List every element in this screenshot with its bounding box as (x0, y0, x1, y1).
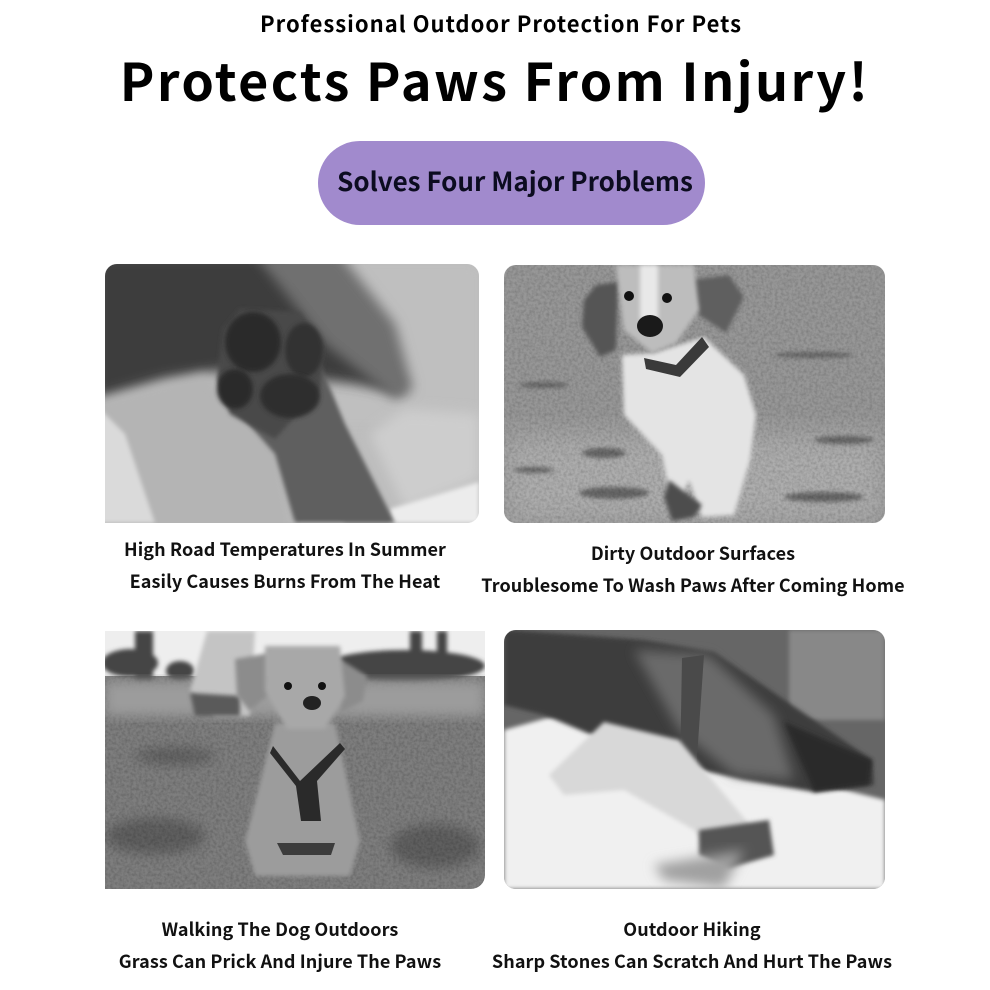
caption: summer heat: High Road Temperatures In Summer (124, 536, 446, 562)
caption: stones (492, 916, 892, 974)
caption: stones: Sharp Stones Can Scratch And Hurt The Paws (492, 948, 892, 974)
caption: dirty surfaces: Dirty Outdoor Surfaces (591, 540, 795, 566)
photo: golden dog resting (504, 630, 885, 889)
caption: grass: Walking The Dog Outdoors (162, 916, 398, 942)
caption: grass: Grass Can Prick And Injure The Paws (119, 948, 441, 974)
caption: grass (119, 916, 441, 974)
badge: solves four major problems: Solves Four Major Problems (337, 162, 693, 199)
caption: stones: Outdoor Hiking (623, 916, 761, 942)
badge: solves four major problems (318, 141, 705, 225)
caption: dirty surfaces: Troublesome To Wash Paws After Coming Home (481, 572, 905, 598)
subtitle: Professional Outdoor Protection For Pets (260, 7, 742, 39)
caption: summer heat (124, 536, 446, 594)
caption: dirty surfaces (481, 540, 905, 598)
title: Protects Paws From Injury! (120, 41, 870, 116)
photo: small dog sitting on grass (105, 631, 485, 889)
caption: summer heat: Easily Causes Burns From The Heat (130, 568, 440, 594)
photo: paw close-up (105, 264, 479, 523)
photo: dog running on dirty beach (504, 265, 885, 523)
